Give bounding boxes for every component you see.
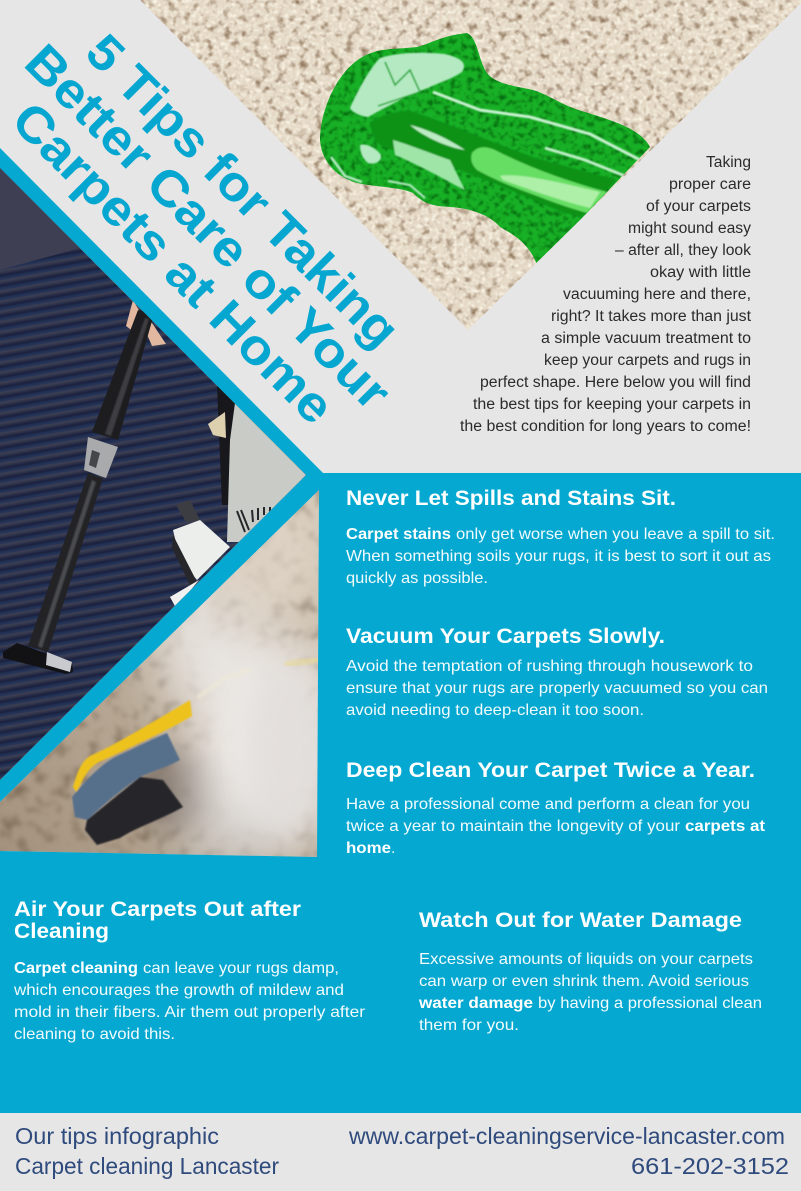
footer left text: Carpet cleaning Lancaster [15,1153,279,1179]
body text: quickly as possible. [346,570,488,587]
tip: Air Your Carpets Out after Cleaning [13,898,366,1043]
icon: green spill [320,33,650,263]
body text: by having a professional clean [538,995,762,1012]
body text: them for you. [419,1017,519,1034]
title: Better Care of Your [14,33,402,421]
body text [13,960,366,1043]
heading: Watch Out for Water Damage [419,909,742,932]
steam cloud [155,595,334,870]
blue content panel [0,473,801,1113]
footer left text: Our tips infographic [15,1123,219,1149]
icon: person's leg and shoe [208,385,236,505]
body text: When something soils your rugs, it is best to sort it out as [346,548,771,565]
icon: vacuum pole and floor head [3,310,154,674]
intro text block: right? It takes more than just [551,308,752,325]
title: 5 Tips for Taking [75,23,410,358]
body text: carpets at [685,818,766,835]
intro text block: okay with little [650,264,751,281]
photo: vacuuming a navy carpet [0,150,320,800]
heading: Cleaning [14,920,109,943]
intro text block: keep your carpets and rugs in [544,352,751,369]
intro text block: vacuuming here and there, [563,286,751,303]
body text: ensure that your rugs are properly vacuumed so you can [346,680,768,697]
intro text block: perfect shape. Here below you will find [480,374,751,391]
body text: Have a professional come and perform a clean for you [346,796,750,813]
icon: cleaner wand head [72,700,192,845]
intro text block [460,154,752,435]
heading: Deep Clean Your Carpet Twice a Year. [346,759,755,782]
intro text block: a simple vacuum treatment to [541,330,751,347]
body text: mold in their fibers. Air them out properly after [14,1004,366,1021]
heading: Air Your Carpets Out after [14,898,301,921]
intro text block: of your carpets [646,198,751,215]
body text: Carpet cleaning [14,960,138,977]
body text [418,951,762,1034]
icon: coiled hose [197,692,206,698]
body text: can warp or even shrink them. Avoid serious [419,973,749,990]
body text [346,526,775,587]
body text: Excessive amounts of liquids on your carpets [419,951,753,968]
tip: Never Let Spills and Stains Sit [346,487,775,587]
tip: Deep Clean Your Carpet Twice a Year [346,759,766,857]
body text: Avoid the temptation of rushing through housework to [346,658,753,675]
body text: cleaning to avoid this. [14,1026,175,1043]
footer bar [0,1113,801,1191]
heading [14,898,301,943]
intro text block: the best condition for long years to come! [460,418,751,435]
body text: can leave your rugs damp, [143,960,339,977]
body text: home [346,840,391,857]
body text: Carpet stains [346,526,451,543]
body text: which encourages the growth of mildew and [13,982,344,999]
wall behind the carpet [0,168,80,270]
body text: only get worse when you leave a spill to sit. [456,526,775,543]
photo: steam cleaner on beige carpet [0,485,334,870]
icon: vacuum body [170,403,306,608]
intro text block: – after all, they look [615,242,751,259]
body text: . [391,840,395,857]
footer contact text: 661-202-3152 [631,1153,789,1179]
heading: Vacuum Your Carpets Slowly. [346,625,665,648]
footer contact text: www.carpet-cleaningservice-lancaster.com [348,1123,785,1149]
intro text block: the best tips for keeping your carpets in [473,396,751,413]
intro text block: might sound easy [628,220,751,237]
title: Carpets at Home [1,91,345,435]
body text [346,796,766,857]
photo: green spill on beige carpet [130,0,801,340]
body text: avoid needing to deep-clean it too soon. [346,702,644,719]
icon: hand on pole [126,300,166,346]
tip: Vacuum Your Carpets Slowly [346,625,768,719]
body text: water damage [418,995,533,1012]
intro text block: proper care [669,176,751,193]
footer left text [15,1123,279,1179]
body text: twice a year to maintain the longevity of your [346,818,681,835]
intro text block: Taking [706,154,751,171]
body text [346,658,768,719]
footer contact text [348,1123,789,1179]
tip: Watch Out for Water Damage [418,909,762,1034]
heading: Never Let Spills and Stains Sit. [346,487,676,510]
diagonal blue band [0,148,323,802]
